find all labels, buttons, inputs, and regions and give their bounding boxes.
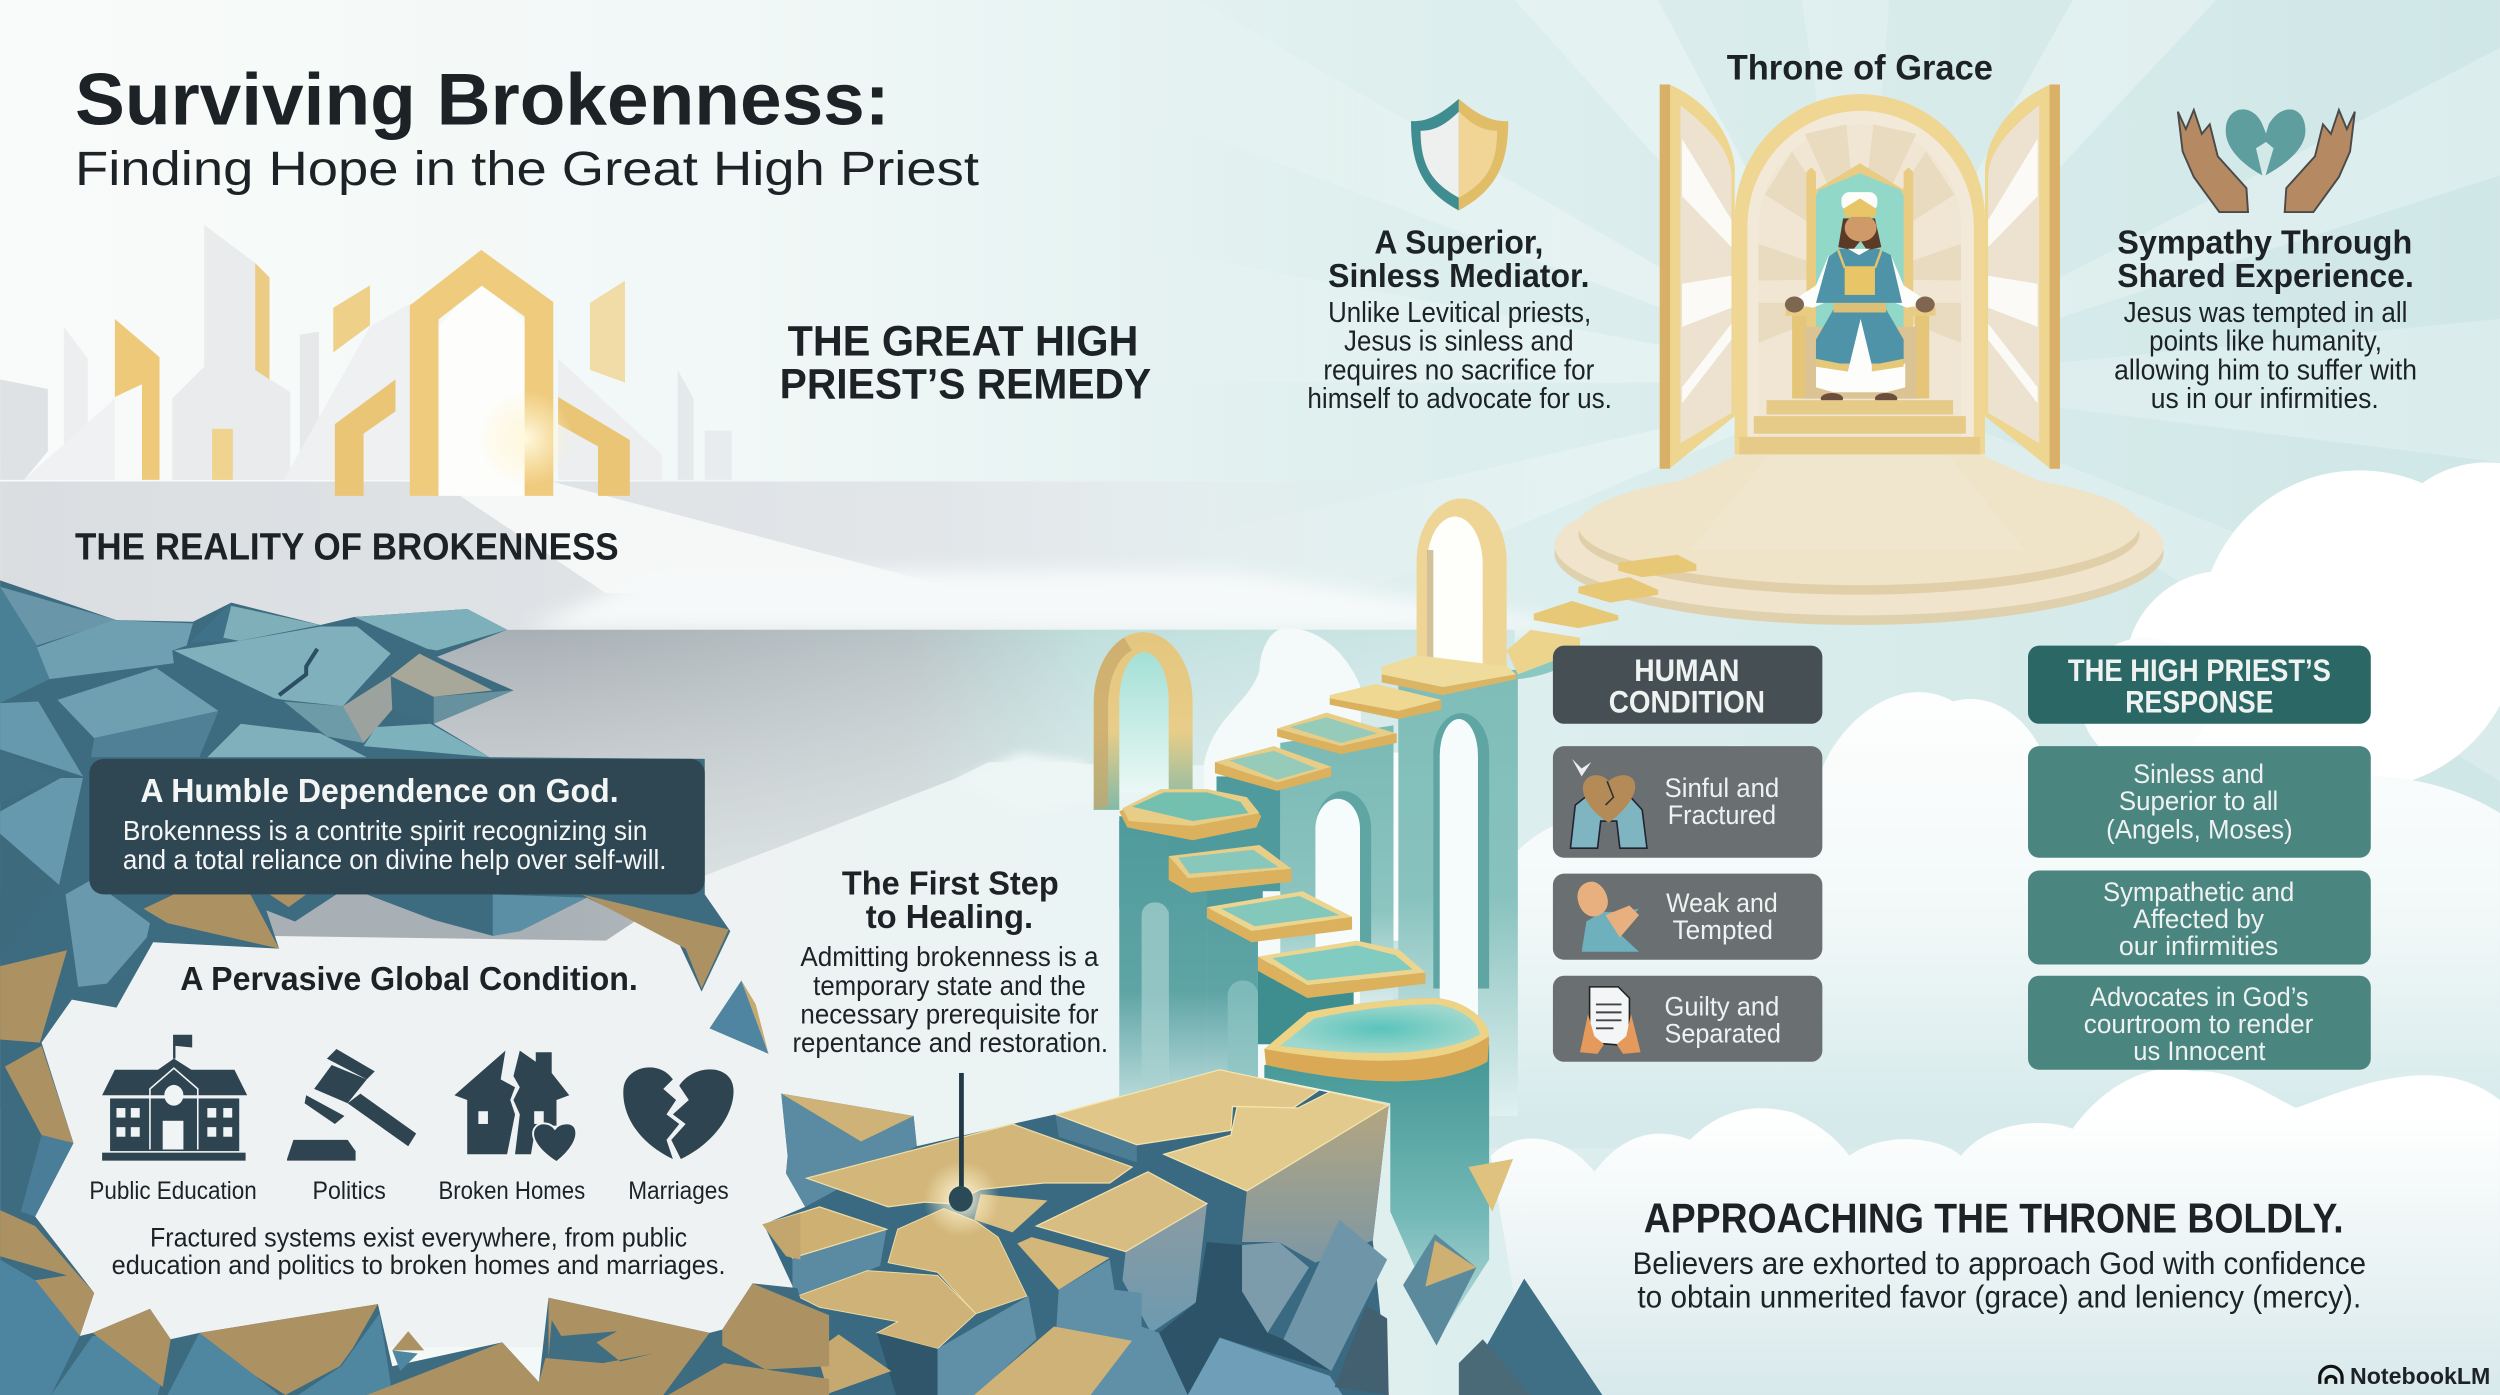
text: approaching the throne boldly: APPROACHING THE THRONE BOLDLY. (1644, 1194, 2344, 1241)
text: first step to healing: temporary state and the (813, 970, 1086, 1001)
icon: school (102, 1035, 247, 1161)
row: weak and tempted: Tempted (1672, 914, 1773, 945)
row: guilty and separated: Separated (1665, 1018, 1781, 1049)
cracked rock platform (761, 1070, 1389, 1395)
throne steps (1739, 400, 1980, 454)
row: advocates in god's courtroom: courtroom to render (2084, 1008, 2313, 1039)
text: a superior, sinless mediator: Sinless Mediator. (1328, 258, 1590, 295)
teal stair tower (1119, 670, 1518, 1331)
panel: a humble dependence on god (89, 759, 705, 894)
panel: human condition (1553, 646, 1822, 1062)
text: approaching the throne boldly: to obtain unmerited favor (grace) and leniency (mercy). (1637, 1278, 2361, 1314)
icon: broken heart (623, 1067, 734, 1159)
clouds (1204, 462, 2500, 1395)
heading: the great high priest's remedy: THE GREAT HIGH (788, 318, 1138, 366)
text: first step to healing (792, 865, 1108, 1058)
row: sympathetic and affected: our infirmities (2119, 930, 2278, 961)
grey ground band and lower sky (0, 481, 1610, 1347)
row: sympathetic and affected (2028, 870, 2371, 965)
row: sinless and superior: Sinless and (2133, 758, 2264, 789)
header: the high priest's response (2028, 646, 2371, 724)
heading: the great high priest's remedy: PRIEST’S REMEDY (780, 361, 1151, 409)
row: sinful and fractured: Fractured (1668, 799, 1776, 830)
text: fractured systems (112, 1222, 725, 1280)
stair steps (1119, 630, 1580, 1081)
upper golden arch (1417, 498, 1507, 666)
platform (1555, 454, 2164, 625)
icon labels: Broken Homes (439, 1178, 585, 1205)
heading: the great high priest's remedy (780, 318, 1151, 409)
row: sinless and superior: (Angels, Moses) (2106, 814, 2293, 845)
text: first step to healing: to Healing. (866, 899, 1033, 936)
icon: broken house (454, 1051, 576, 1162)
city of broken buildings with golden doorway (0, 225, 732, 496)
text: first step to healing: Admitting brokenness is a (800, 941, 1099, 972)
title: Surviving Brokenness: (75, 58, 890, 140)
panel: a humble dependence on god: and a total reliance on divine help over self-will. (123, 844, 666, 875)
text: sympathy through shared experience (2114, 224, 2417, 415)
throne of grace illustration (1555, 84, 2164, 625)
text: first step to healing: The First Step (842, 865, 1059, 902)
row: sinful and fractured: Sinful and (1665, 772, 1779, 803)
text: a superior, sinless mediator: A Superior, (1374, 224, 1543, 261)
icon labels: Politics (313, 1178, 386, 1205)
text: a superior, sinless mediator: Jesus is sinless and (1344, 326, 1574, 358)
text: a superior, sinless mediator: Unlike Levitical priests, (1328, 297, 1591, 329)
panel: a humble dependence on god: Brokenness is a contrite spirit recognizing sin (123, 815, 647, 846)
text: sympathy through shared experience: Jesus was tempted in all (2124, 297, 2407, 329)
row: sympathetic and affected: Sympathetic and (2103, 876, 2294, 907)
title (75, 58, 979, 196)
text: a superior, sinless mediator: requires no sacrifice for (1323, 354, 1595, 386)
header: human condition: HUMAN (1634, 652, 1739, 688)
text: sympathy through shared experience: Shared Experience. (2117, 258, 2414, 295)
row: sinless and superior: Superior to all (2119, 785, 2278, 816)
text: sympathy through shared experience: us in our infirmities. (2151, 383, 2379, 415)
icon: shield (1411, 99, 1508, 210)
header: the high priest's response: THE HIGH PRIEST’S (2068, 652, 2331, 688)
row: guilty and separated: Guilty and (1665, 991, 1779, 1022)
text: sympathy through shared experience: allowing him to suffer with (2114, 354, 2417, 386)
notebooklm logo: NotebookLM (2350, 1363, 2490, 1389)
row: sinless and superior (2028, 746, 2371, 858)
row: advocates in god's courtroom: Advocates in God’s (2090, 981, 2309, 1012)
row: sympathetic and affected: Affected by (2133, 903, 2264, 934)
icon labels (89, 1178, 729, 1205)
row: weak and tempted (1553, 874, 1822, 960)
heading: throne of grace: Throne of Grace (1727, 49, 1993, 88)
high priest seated on throne (1785, 163, 1936, 404)
row: weak and tempted: Weak and (1666, 887, 1778, 918)
text: a superior, sinless mediator (1307, 224, 1612, 415)
text: first step to healing: necessary prerequisite for (800, 999, 1099, 1030)
open doors (1660, 84, 2060, 469)
small rock shards near white area (392, 980, 800, 1371)
text: sympathy through shared experience: points like humanity, (2149, 326, 2382, 358)
first step pin marker (923, 1073, 1000, 1237)
text: a superior, sinless mediator: himself to advocate for us. (1307, 383, 1612, 415)
left golden arch (1094, 632, 1193, 810)
text: first step to healing: repentance and restoration. (792, 1027, 1108, 1058)
header: the high priest's response: RESPONSE (2125, 684, 2274, 720)
header: human condition: CONDITION (1609, 684, 1765, 720)
left cracked rock frame (0, 580, 829, 1395)
panel: a humble dependence on god: A Humble Dependence on God. (140, 773, 619, 810)
title: Finding Hope in the Great High Priest (75, 143, 979, 196)
text: approaching the throne boldly: Believers are exhorted to approach God with confidence (1633, 1245, 2366, 1281)
panel: the high priest's response (2028, 646, 2371, 1070)
stepping stones to the throne (1534, 555, 1696, 628)
row: sinful and fractured (1553, 746, 1822, 858)
row: advocates in god's courtroom: us Innocent (2133, 1035, 2266, 1066)
arch behind throne (1735, 94, 1985, 454)
header: human condition (1553, 646, 1822, 724)
heading: a pervasive global condition: A Pervasive Global Condition. (180, 961, 638, 998)
heading: the reality of brokenness: THE REALITY OF BROKENNESS (75, 526, 619, 569)
icon: gavel (287, 1049, 416, 1161)
row: guilty and separated (1553, 976, 1822, 1062)
icon labels: Marriages (628, 1178, 729, 1205)
text: fractured systems: education and politics to broken homes and marriages. (112, 1249, 725, 1280)
icon: hands holding broken heart (2178, 109, 2355, 212)
text: fractured systems: Fractured systems exist everywhere, from public (150, 1222, 687, 1253)
icon labels: Public Education (89, 1178, 257, 1205)
text: approaching the throne boldly (1633, 1194, 2366, 1314)
row: advocates in god's courtroom (2028, 976, 2371, 1070)
falling rock shards (1403, 1159, 1602, 1395)
text: sympathy through shared experience: Sympathy Through (2117, 224, 2412, 261)
